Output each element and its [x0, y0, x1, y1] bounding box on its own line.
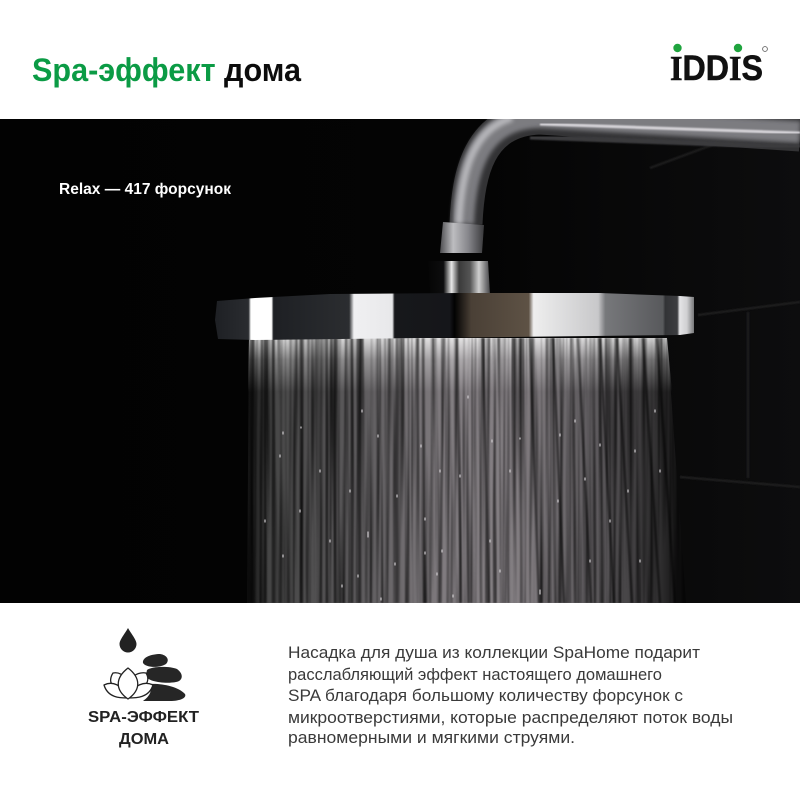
water spray	[247, 338, 686, 603]
water body	[247, 338, 686, 603]
head collar	[440, 261, 490, 294]
description text: микроотверстиями, которые распределяют поток воды	[288, 709, 733, 727]
dark streaks	[252, 338, 675, 603]
label: Relax 417: Relax — 417 форсунок	[59, 181, 231, 198]
description text: равномерными и мягкими струями.	[288, 729, 575, 747]
wall tile lines	[650, 142, 800, 487]
description text: расслабляющий эффект настоящего домашнего	[288, 666, 662, 684]
icon caption second line: ДОМА	[119, 731, 169, 748]
title: Spa-эффект дома	[32, 52, 302, 88]
icon caption: SPA-ЭФФЕКТ	[88, 709, 199, 726]
logo: IDDIS: IDDIS	[670, 49, 763, 88]
icon: lotus	[104, 668, 153, 699]
description text: Насадка для душа из коллекции SpaHome подарит	[288, 644, 700, 662]
description text	[288, 644, 733, 747]
droplets	[265, 396, 660, 600]
bright water near head	[248, 338, 672, 392]
streak texture	[247, 338, 686, 603]
photo panel: shower head with water	[0, 117, 800, 603]
shower arm pipe	[459, 117, 800, 224]
pipe nut	[440, 222, 484, 253]
icon: spa drop, stones and lotus	[88, 628, 199, 748]
description text: SPA благодаря большому количеству форсунок с	[288, 687, 683, 705]
shower head rim	[215, 293, 694, 340]
icon: stones	[143, 654, 185, 701]
icon: water drop	[120, 628, 136, 652]
